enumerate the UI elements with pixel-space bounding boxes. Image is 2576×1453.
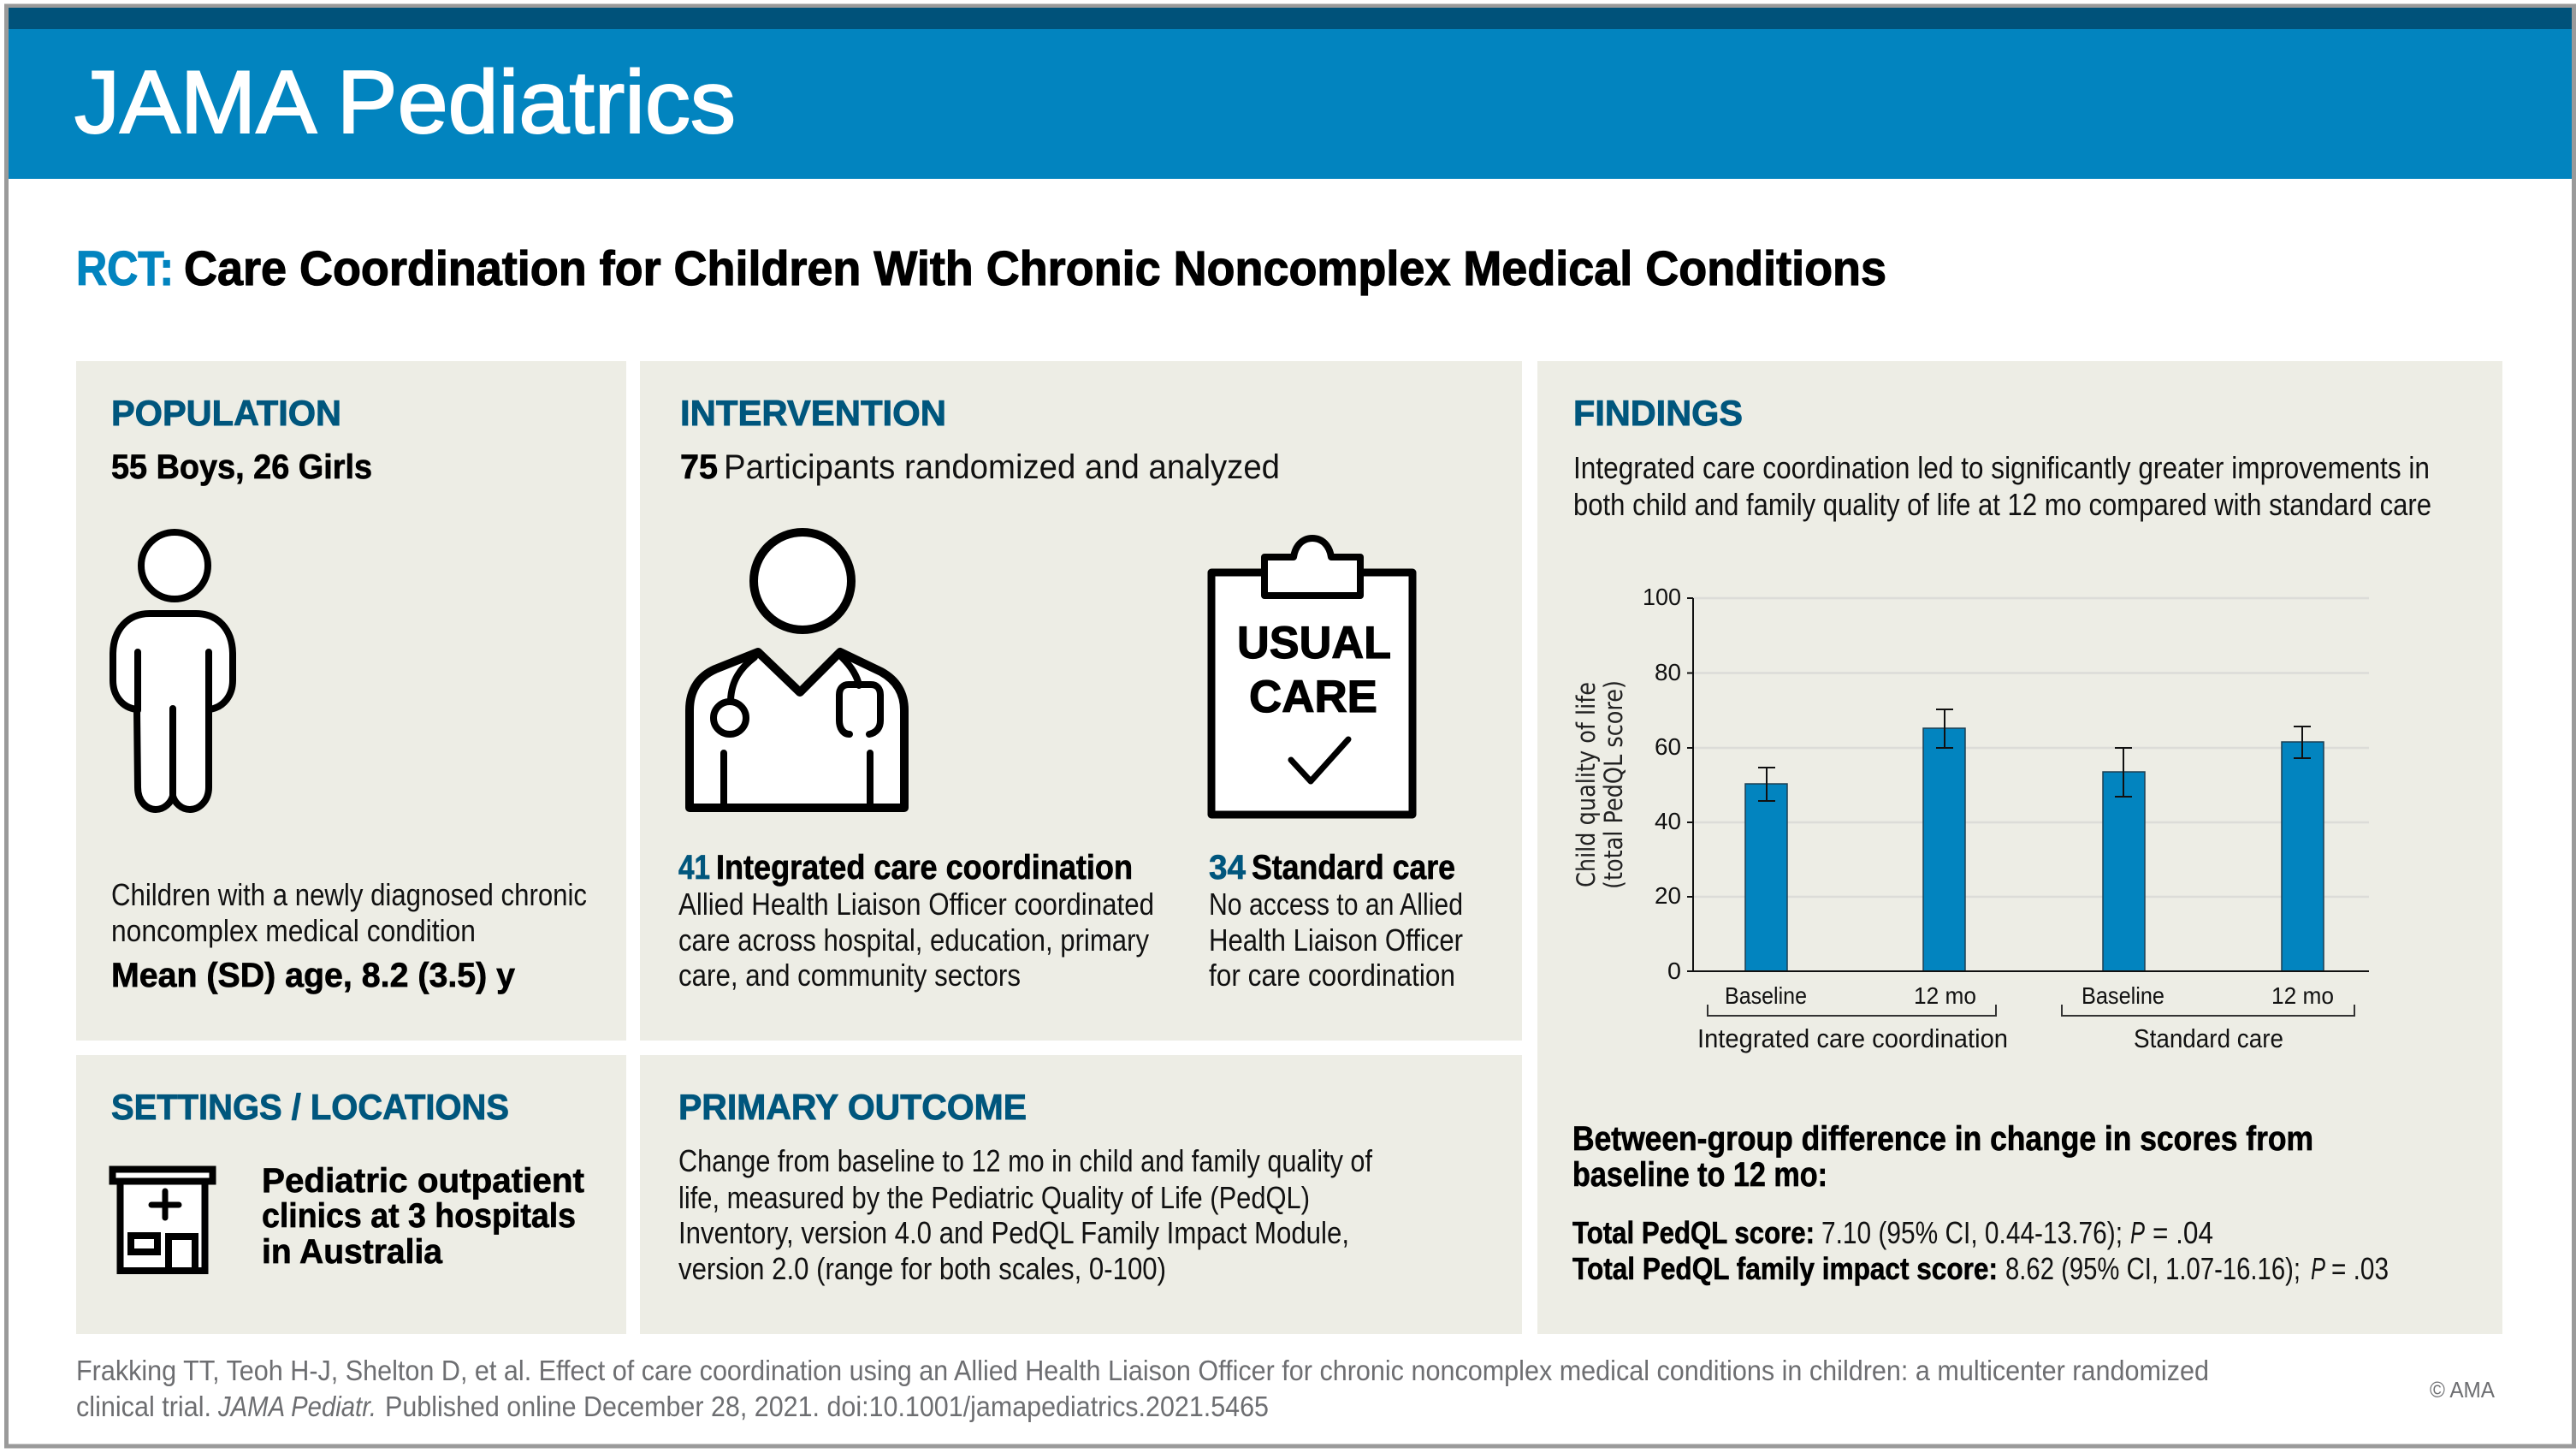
panel: settings and locations	[76, 1055, 626, 1334]
panel: intervention	[640, 361, 1522, 1041]
primary outcome description	[678, 1143, 1373, 1286]
heading: intervention: INTERVENTION	[680, 393, 946, 433]
axes	[1687, 598, 2369, 971]
icon: usual care clipboard: CARE	[1249, 672, 1377, 722]
total PedQL score: P	[2130, 1215, 2145, 1250]
settings description: in Australia	[262, 1233, 443, 1271]
panel: population	[76, 361, 626, 1041]
citation: clinical trial.	[76, 1391, 211, 1422]
bars	[1745, 728, 2324, 971]
x axis labels: Baseline	[2082, 982, 2164, 1009]
heading: primary outcome: PRIMARY OUTCOME	[678, 1087, 1027, 1127]
x axis labels	[1725, 982, 2334, 1009]
findings summary: both child and family quality of life at 12 mo compared with standard care	[1573, 487, 2431, 522]
y axis label	[1572, 680, 1628, 889]
icon: usual care clipboard: USUAL	[1237, 618, 1391, 668]
citation: Frakking TT, Teoh H-J, Shelton D, et al. Effect of care coordination using an Allied Health Liaison Officer for chronic noncomplex medical conditions in children: a multicenter randomized	[76, 1355, 2209, 1386]
group labels: Standard care	[2134, 1023, 2283, 1053]
error bars	[1758, 709, 2311, 801]
arm: integrated care coordination: care across hospital, education, primary	[678, 922, 1149, 958]
icon: usual care clipboard	[1211, 538, 1412, 815]
total PedQL family impact score: = .03	[2331, 1251, 2389, 1286]
y axis ticks: 100	[1643, 584, 1681, 610]
bar chart	[1572, 584, 2369, 1053]
population description: noncomplex medical condition	[111, 913, 476, 948]
arm: integrated care coordination	[678, 849, 1154, 993]
x axis labels: 12 mo	[1914, 982, 1976, 1009]
total PedQL score: = .04	[2153, 1215, 2213, 1250]
population description: Children with a newly diagnosed chronic	[111, 877, 587, 912]
y axis ticks: 60	[1655, 733, 1681, 760]
panel: findings	[1537, 361, 2502, 1334]
findings summary	[1573, 450, 2431, 522]
settings description	[262, 1162, 584, 1271]
participants randomized: Participants randomized and analyzed	[724, 448, 1280, 486]
primary outcome description: life, measured by the Pediatric Quality of Life (PedQL)	[678, 1180, 1310, 1215]
panel: primary outcome	[640, 1055, 1522, 1334]
title: RCT:	[76, 241, 174, 296]
settings description: clinics at 3 hospitals	[262, 1197, 576, 1235]
total PedQL family impact score: 8.62 (95% CI, 1.07-16.16);	[2005, 1251, 2301, 1286]
icon: child	[113, 532, 233, 810]
total PedQL score	[1572, 1215, 2213, 1250]
arm: standard care: Standard care	[1252, 849, 1455, 887]
citation: Published online December 28, 2021. doi:10.1001/jamapediatrics.2021.5465	[385, 1391, 1269, 1422]
arm: standard care	[1209, 849, 1463, 993]
findings summary: Integrated care coordination led to significantly greater improvements in	[1573, 450, 2430, 485]
y axis ticks	[1643, 584, 1681, 984]
arm: integrated care coordination: 41	[678, 849, 710, 887]
mean age: Mean (SD) age, 8.2 (3.5) y	[111, 957, 516, 994]
group brackets	[1708, 1005, 2354, 1016]
between-group heading: baseline to 12 mo:	[1572, 1156, 1827, 1194]
arm: integrated care coordination: care, and community sectors	[678, 958, 1021, 993]
primary outcome description: Inventory, version 4.0 and PedQL Family Impact Module,	[678, 1215, 1349, 1250]
y axis ticks: 40	[1655, 808, 1681, 834]
total PedQL score: 7.10 (95% CI, 0.44-13.76);	[1821, 1215, 2123, 1250]
arm: integrated care coordination: Allied Health Liaison Officer coordinated	[678, 887, 1154, 922]
primary outcome description: Change from baseline to 12 mo in child and family quality of	[678, 1143, 1373, 1178]
arm: integrated care coordination: Integrated care coordination	[716, 849, 1133, 887]
y axis label: Child quality of life	[1572, 682, 1601, 887]
icon: doctor with stethoscope	[690, 532, 904, 808]
population description	[111, 877, 587, 948]
group labels	[1697, 1023, 2283, 1053]
between-group heading: Between-group difference in change in scores from	[1572, 1120, 2313, 1158]
citation: JAMA Pediatr.	[217, 1391, 376, 1422]
heading: settings: SETTINGS / LOCATIONS	[111, 1087, 509, 1127]
y axis ticks: 0	[1667, 958, 1681, 984]
settings description: Pediatric outpatient	[262, 1162, 584, 1200]
participant counts: 55 Boys, 26 Girls	[111, 448, 372, 486]
icon: hospital	[113, 1169, 212, 1271]
primary outcome description: version 2.0 (range for both scales, 0-100)	[678, 1251, 1166, 1286]
total PedQL family impact score: Total PedQL family impact score:	[1572, 1251, 1998, 1286]
arm: standard care: for care coordination	[1209, 958, 1455, 993]
between-group heading	[1572, 1120, 2313, 1194]
x axis labels: 12 mo	[2271, 982, 2334, 1009]
participants randomized: 75	[680, 448, 718, 486]
title: Care Coordination for Children With Chronic Noncomplex Medical Conditions	[184, 241, 1886, 296]
arm: standard care: 34	[1209, 849, 1247, 887]
y axis label: (total PedQL score)	[1599, 680, 1628, 889]
total PedQL score: Total PedQL score:	[1572, 1215, 1815, 1250]
total PedQL family impact score: P	[2311, 1251, 2325, 1286]
arm: standard care: Health Liaison Officer	[1209, 922, 1463, 958]
copyright: © AMA	[2430, 1377, 2496, 1403]
heading: population: POPULATION	[111, 393, 341, 433]
header banner	[9, 8, 2572, 179]
y axis ticks: 80	[1655, 659, 1681, 685]
journal name: JAMA Pediatrics	[74, 53, 736, 152]
x axis labels: Baseline	[1725, 982, 1807, 1009]
arm: standard care: No access to an Allied	[1209, 887, 1463, 922]
citation	[76, 1355, 2209, 1422]
total PedQL family impact score	[1572, 1251, 2389, 1286]
y axis ticks: 20	[1655, 882, 1681, 909]
heading: findings: FINDINGS	[1573, 393, 1743, 433]
group labels: Integrated care coordination	[1697, 1023, 2008, 1053]
